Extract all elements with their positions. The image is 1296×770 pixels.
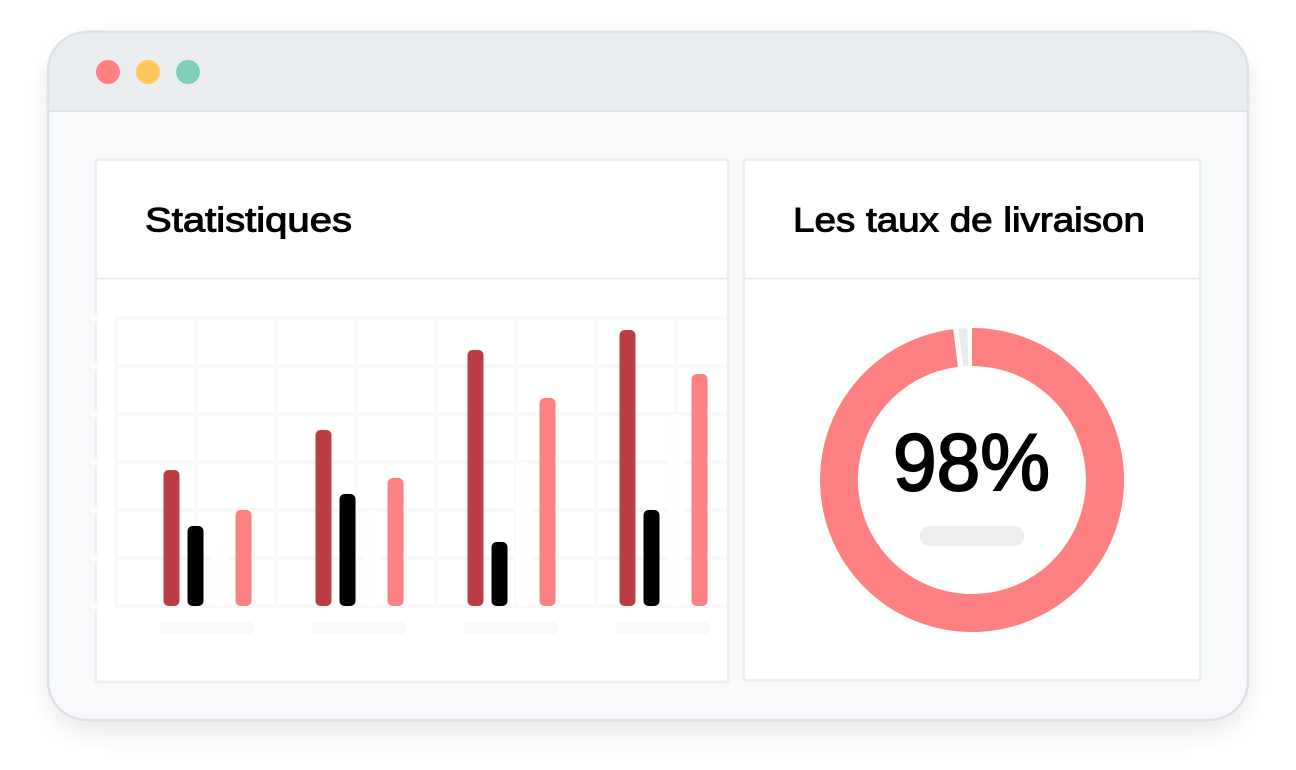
heading: Statistiques: Statistiques — [145, 202, 352, 240]
donut label placeholder — [920, 526, 1024, 546]
bar group 4 — [620, 330, 708, 606]
bar chart — [164, 330, 708, 606]
window control dots — [96, 60, 200, 84]
bar group 1 — [164, 470, 252, 606]
x-axis label placeholders — [160, 622, 712, 634]
donut pink segment — [820, 328, 1124, 632]
donut chart — [820, 328, 1124, 632]
chart grid — [114, 316, 727, 608]
panel: delivery rate — [744, 160, 1200, 680]
bar group 2 — [316, 430, 404, 606]
bar group 3 — [468, 350, 556, 606]
donut grey segment — [958, 328, 968, 366]
grid line end caps — [92, 314, 98, 610]
heading: Les taux de livraison: Les taux de livraison — [793, 202, 1145, 240]
panel: statistics — [92, 160, 728, 682]
donut value: 98% — [893, 418, 1050, 508]
window title bar — [49, 34, 1247, 112]
